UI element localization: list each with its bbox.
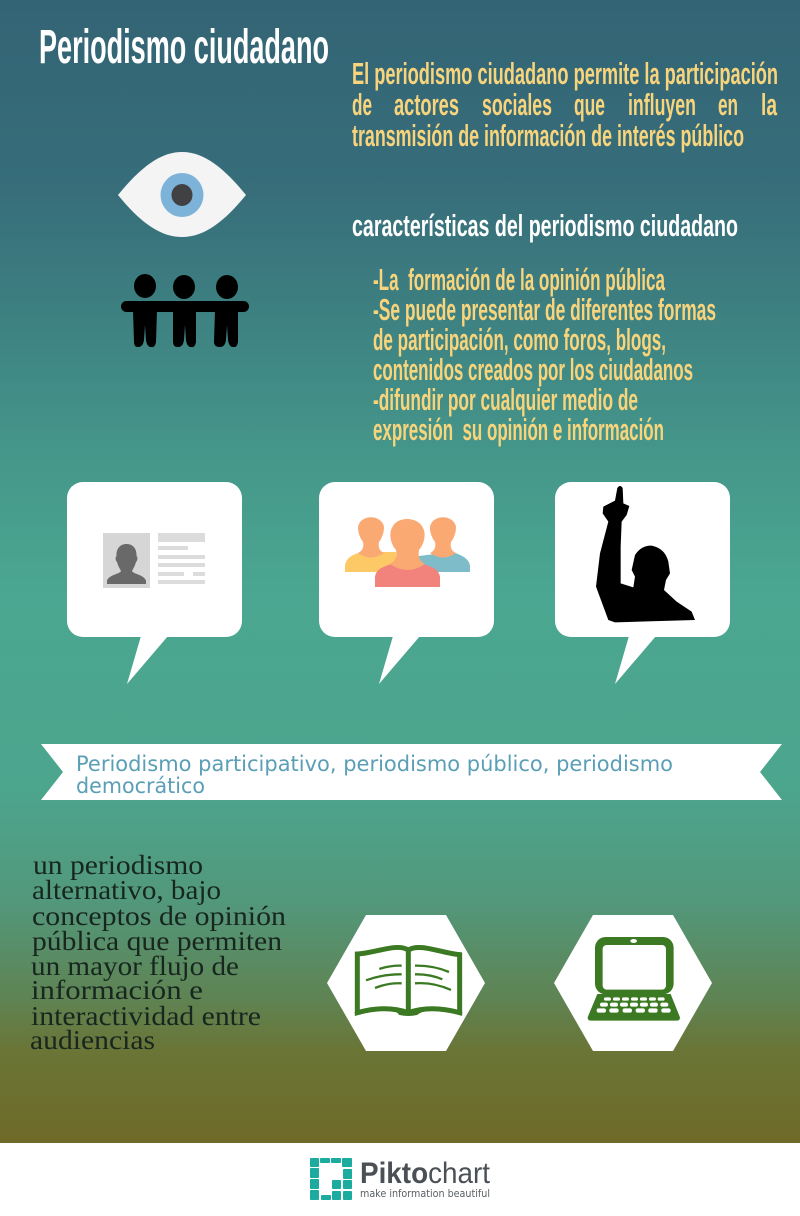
icon: group of people xyxy=(345,517,470,587)
body paragraph: alternativo, bajo xyxy=(32,875,221,905)
intro text: que xyxy=(574,87,605,122)
piktochart logo xyxy=(310,1157,491,1200)
intro text: sociales xyxy=(482,87,552,122)
logo wordmark: Piktochart xyxy=(360,1157,491,1190)
ribbon banner xyxy=(41,744,782,800)
logo tagline: make information beautiful xyxy=(360,1187,490,1200)
body paragraph: un mayor flujo de xyxy=(31,951,239,981)
footer panel xyxy=(0,1143,800,1216)
body paragraph: audiencias xyxy=(30,1025,155,1055)
banner text: Periodismo participativo, periodismo público, periodismo xyxy=(76,752,673,776)
logo mark xyxy=(310,1158,352,1200)
body paragraph: conceptos de opinión xyxy=(32,901,287,931)
banner text: democrático xyxy=(76,774,205,798)
title: Periodismo ciudadano xyxy=(39,21,329,74)
icon: profile card xyxy=(103,533,205,588)
intro text: actores xyxy=(394,87,459,122)
icon: eye xyxy=(118,152,246,237)
icon: three people linked xyxy=(121,274,249,347)
intro text: de xyxy=(352,87,372,122)
icon: laptop xyxy=(588,937,680,1021)
hexagon: laptop xyxy=(554,915,712,1051)
body paragraph xyxy=(30,850,287,1055)
speech bubble: group of people xyxy=(319,482,494,684)
icon: open book xyxy=(355,947,462,1014)
body paragraph: un periodismo xyxy=(33,850,203,880)
speech bubble: profile card xyxy=(67,482,242,684)
body paragraph: interactividad entre xyxy=(31,1001,261,1031)
intro text: la xyxy=(761,87,777,122)
intro text: influyen xyxy=(628,87,696,122)
intro text: en xyxy=(718,87,738,122)
body paragraph: información e xyxy=(31,975,203,1005)
banner text xyxy=(76,752,673,798)
intro text xyxy=(352,56,778,153)
hexagon: book xyxy=(327,915,485,1051)
icon: raised hand silhouette xyxy=(596,486,695,622)
characteristics list xyxy=(373,262,716,447)
body paragraph: pública que permiten xyxy=(32,926,283,956)
speech bubble: raised hand xyxy=(555,482,730,684)
